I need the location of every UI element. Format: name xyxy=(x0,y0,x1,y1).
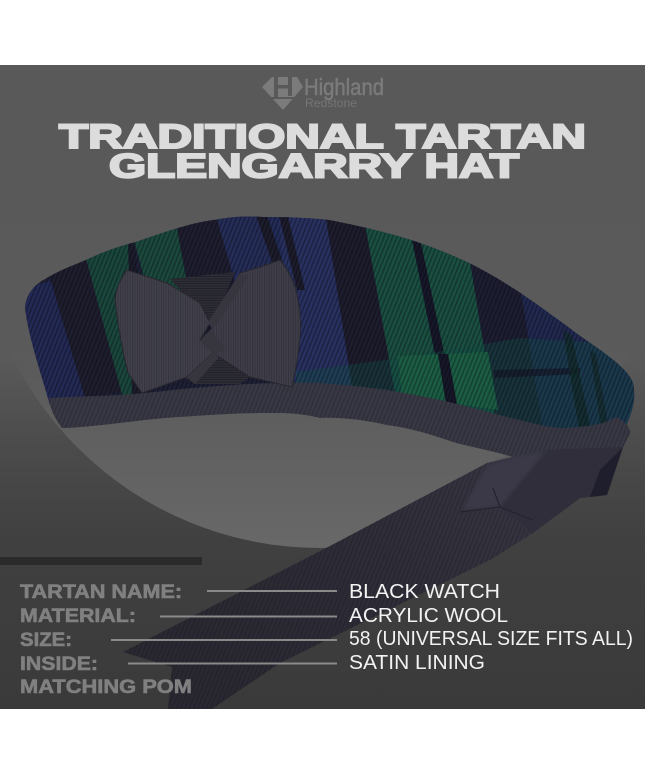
title xyxy=(59,118,586,186)
fabric twill texture xyxy=(20,210,640,440)
logo wordmark: Highland xyxy=(304,74,384,100)
hat band xyxy=(49,383,630,457)
value: black watch: BLACK WATCH xyxy=(349,581,500,603)
spec values xyxy=(349,581,633,674)
value: size: 58 (UNIVERSAL SIZE FITS ALL) xyxy=(349,628,633,650)
title line 2: GLENGARRY HAT xyxy=(109,148,519,186)
hat xyxy=(20,210,640,709)
bow left lobe xyxy=(115,270,213,393)
dark bar above specifications xyxy=(0,557,202,565)
label: matching pom: MATCHING POM xyxy=(20,677,192,698)
value: satin lining: SATIN LINING xyxy=(349,652,485,674)
value: acrylic wool: ACRYLIC WOOL xyxy=(349,605,508,627)
label: inside: INSIDE: xyxy=(20,654,98,675)
bow xyxy=(115,260,300,393)
spec labels xyxy=(20,582,192,698)
background arc behind hat xyxy=(32,390,512,548)
bow right lobe xyxy=(200,260,300,387)
icon: diamond H mark xyxy=(262,77,303,110)
logo sub-wordmark: Redstone xyxy=(305,96,357,110)
title line 1: TRADITIONAL TARTAN xyxy=(59,118,586,156)
bow rib texture xyxy=(115,260,300,393)
label: size: SIZE: xyxy=(20,630,72,651)
hat tail ribbon xyxy=(123,433,630,709)
logo: Highland Redstone xyxy=(262,74,384,110)
specifications xyxy=(20,581,633,698)
bow knot folds xyxy=(187,273,248,384)
hat crown tartan xyxy=(20,210,640,440)
tail folds xyxy=(460,488,533,520)
bow centre backing xyxy=(170,272,250,384)
tartan horizontal band xyxy=(296,338,634,428)
label: material: MATERIAL: xyxy=(20,606,136,627)
label: tartan name: TARTAN NAME: xyxy=(20,582,182,603)
